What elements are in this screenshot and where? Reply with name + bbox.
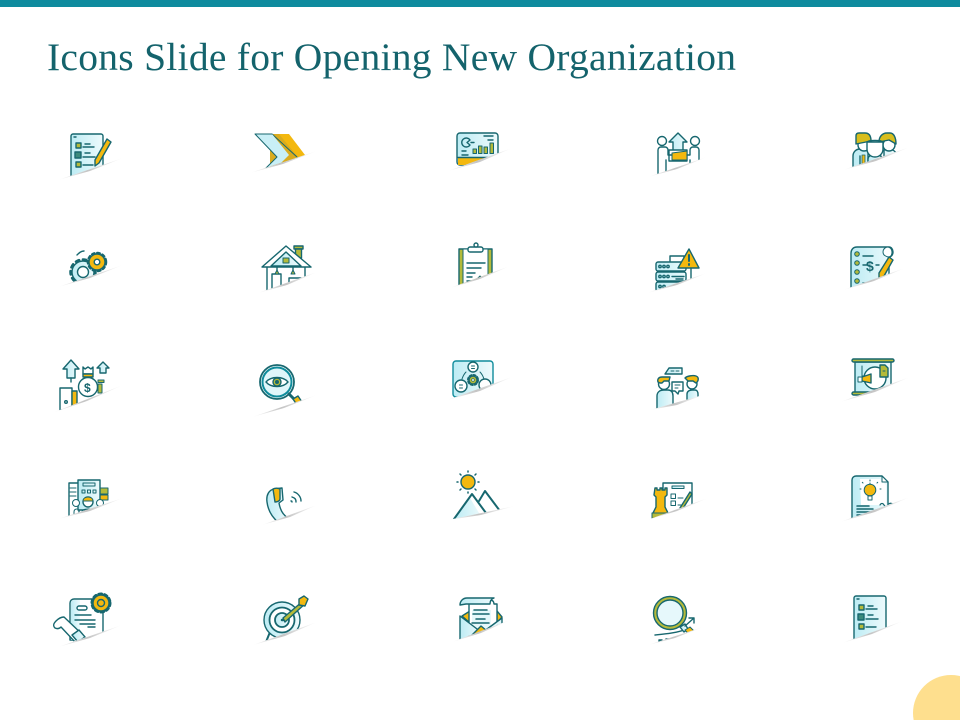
icon: house [261,245,312,292]
icon: money bag growth: $ [84,381,91,395]
icon: server with warning [652,248,701,292]
icon: document with light bulb [846,475,903,520]
icon: magnifier with eye [259,364,310,415]
icon: chatting people [655,367,699,409]
icon: office buildings and staff [64,479,116,518]
icon: sun over mountains [453,470,508,519]
icon: target with arrow [258,595,310,644]
icon: chevrons [254,134,310,171]
icon: clipboard [456,242,504,286]
title: Icons Slide for Opening New Organization [47,35,736,79]
icon: people with puzzle and up arrow [654,132,700,176]
icon: money bag growth [59,359,116,410]
icon: certificate with gear and scroll [53,592,115,645]
icon: invoice with dollar [850,246,898,288]
icon: network panel [452,360,506,398]
icon: presentation board [846,358,903,400]
icon: envelope with scroll letter [457,597,504,640]
icon: gears [65,250,116,285]
icon: telephone handset [266,487,312,524]
icon: ring with growth arrow [652,596,697,644]
icon: team of three [848,132,903,168]
icon: chess rook strategy board [652,482,701,518]
icon: checklist with pencil [65,133,116,178]
icon: checklist document [848,595,896,641]
icon: dashboard screen [453,132,506,170]
corner circle [913,675,960,720]
icon: invoice with dollar: $ [866,258,874,274]
top teal bar [0,0,960,7]
